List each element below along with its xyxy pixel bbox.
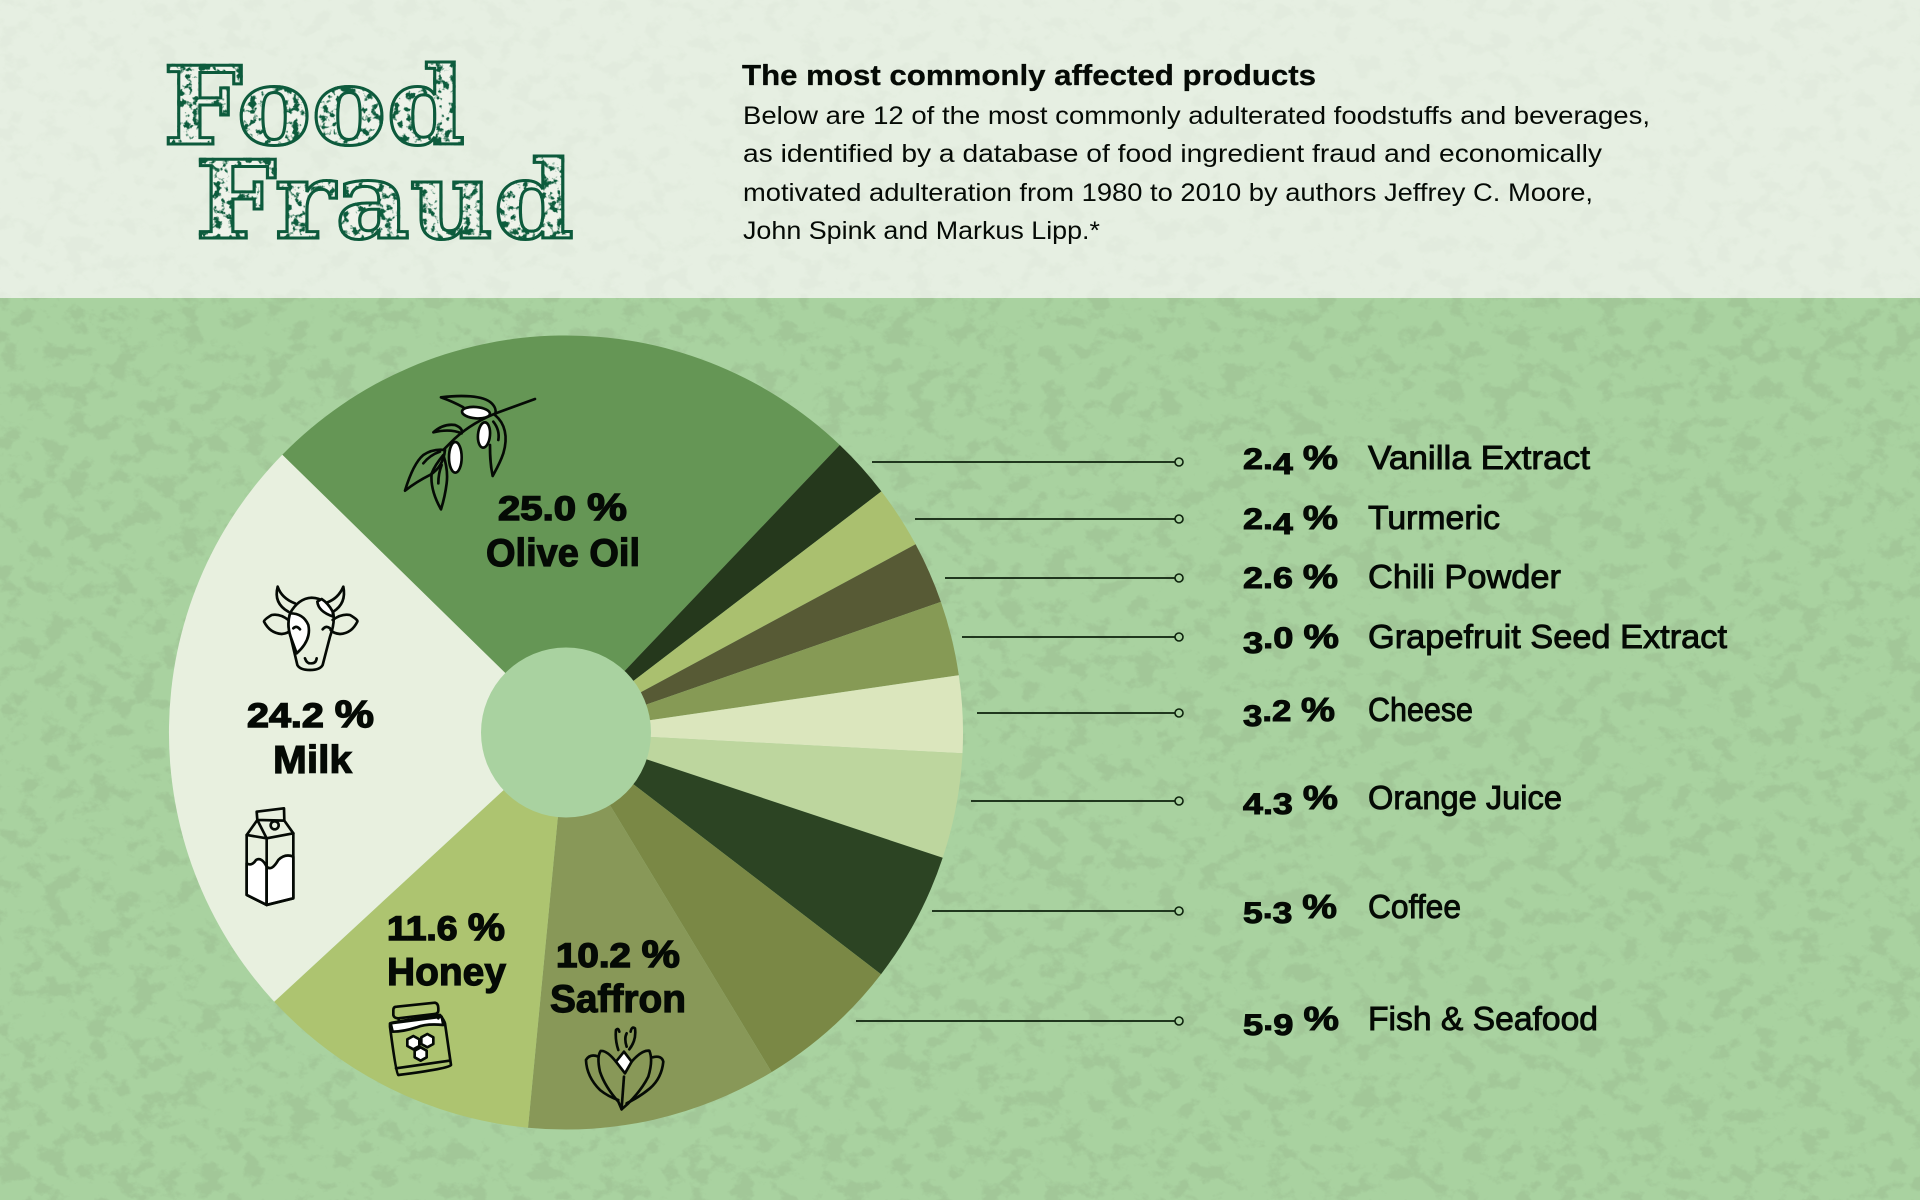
legend row: coffee: 3 <box>1273 897 1292 930</box>
leader line: coffee <box>932 907 1183 915</box>
label: saffron <box>550 934 686 1021</box>
legend row: chili powder <box>1243 558 1561 595</box>
legend row: cheese: .2 <box>1262 695 1291 728</box>
legend row: fish and seafood: 5 <box>1243 1009 1263 1042</box>
label: milk: Milk <box>273 739 352 782</box>
slice: honey <box>274 732 566 1128</box>
legend row: cheese <box>1243 691 1473 733</box>
legend row: turmeric: 4 <box>1273 508 1293 541</box>
legend row: vanilla extract: Vanilla Extract <box>1368 439 1590 476</box>
pie chart <box>169 335 963 1130</box>
legend row: grapefruit seed extract: Grapefruit Seed Extract <box>1368 618 1727 655</box>
slice: chili powder <box>566 544 941 732</box>
legend row: fish and seafood: % <box>1304 1000 1339 1037</box>
legend row: fish and seafood: 9 <box>1273 1009 1293 1042</box>
legend row: fish and seafood <box>1243 1000 1598 1042</box>
label: milk: 24. <box>247 697 294 735</box>
leader line: grapefruit seed extract <box>962 633 1183 641</box>
label: saffron: Saffron <box>550 978 686 1021</box>
legend row: vanilla extract: 2. <box>1243 443 1268 476</box>
label: olive oil: Olive Oil <box>486 532 640 575</box>
leader line: vanilla extract <box>872 458 1183 466</box>
slice: grapefruit seed extract <box>566 602 959 732</box>
heading: The most commonly affected products <box>742 60 1316 92</box>
intro text block: Below are 12 of the most commonly adulterated foodstuffs and beverages, <box>743 102 1650 130</box>
legend row: turmeric: % <box>1303 499 1338 536</box>
icon: cow <box>264 587 357 670</box>
legend row: cheese: 3 <box>1243 700 1262 733</box>
label: olive oil: 25.0 % <box>498 487 627 529</box>
icon: olive branch <box>405 396 535 509</box>
slice: olive oil <box>282 335 840 732</box>
legend row: grapefruit seed extract: 3 <box>1243 627 1263 660</box>
legend row: vanilla extract <box>1243 439 1590 481</box>
label: olive oil <box>486 487 640 575</box>
slice: saffron <box>528 732 772 1130</box>
intro text block: motivated adulteration from 1980 to 2010 by authors Jeffrey C. Moore, <box>743 179 1593 207</box>
label: milk <box>247 694 374 782</box>
legend row: orange juice: 4.3 <box>1243 788 1293 821</box>
legend row: turmeric: 2. <box>1243 503 1268 536</box>
icon: saffron flower <box>586 1028 663 1109</box>
leader line: fish and seafood <box>856 1017 1183 1025</box>
title <box>163 44 574 264</box>
legend row: coffee: % <box>1302 888 1337 925</box>
legend row: grapefruit seed extract <box>1243 618 1727 660</box>
slice: cheese <box>566 675 963 753</box>
label: milk: % <box>335 694 374 736</box>
legend row: cheese: Cheese <box>1368 691 1473 728</box>
legend row: chili powder: Chili Powder <box>1368 558 1561 595</box>
slice: orange juice <box>566 732 962 858</box>
label: honey <box>387 907 506 994</box>
legend row: coffee <box>1243 888 1461 930</box>
leader line: turmeric <box>915 515 1183 523</box>
legend row: fish and seafood: . <box>1263 1004 1273 1037</box>
legend row: chili powder: 2.6 % <box>1243 558 1338 595</box>
slice: milk <box>169 455 566 1002</box>
title: Food <box>163 44 465 170</box>
legend row: vanilla extract: % <box>1303 439 1338 476</box>
slice: vanilla extract <box>566 445 881 732</box>
intro text block <box>743 102 1650 245</box>
slice: fish and seafood <box>566 732 881 1072</box>
icon: honey jar <box>390 1003 451 1075</box>
legend row: turmeric: Turmeric <box>1368 499 1500 536</box>
leader line: orange juice <box>971 797 1183 805</box>
label: honey: 11.6 % <box>387 907 505 949</box>
leader line: cheese <box>977 709 1183 717</box>
legend row: grapefruit seed extract: .0 <box>1263 622 1293 655</box>
label: saffron: 10.2 % <box>556 934 680 976</box>
slice: turmeric <box>566 491 916 732</box>
intro text block: John Spink and Markus Lipp.* <box>743 217 1100 245</box>
legend row: coffee: . <box>1263 892 1273 925</box>
legend row: coffee: 5 <box>1243 897 1263 930</box>
legend row: grapefruit seed extract: % <box>1304 618 1339 655</box>
legend row: orange juice <box>1243 779 1562 821</box>
header band <box>0 0 1920 298</box>
title: Fraud <box>195 138 574 264</box>
intro text block: as identified by a database of food ingredient fraud and economically <box>743 140 1603 168</box>
icon: milk carton <box>247 808 293 905</box>
leader line: chili powder <box>945 574 1183 582</box>
legend row: orange juice: % <box>1303 779 1338 816</box>
label: honey: Honey <box>387 951 506 994</box>
legend row: orange juice: Orange Juice <box>1368 779 1562 816</box>
legend row: vanilla extract: 4 <box>1273 448 1293 481</box>
legend row: coffee: Coffee <box>1368 888 1461 925</box>
label: milk: 2 <box>302 697 324 735</box>
legend row: cheese: % <box>1301 691 1335 728</box>
centre hole <box>481 648 651 818</box>
legend row: fish and seafood: Fish & Seafood <box>1368 1000 1598 1037</box>
background: green textured panel <box>0 298 1920 1200</box>
legend row: turmeric <box>1243 499 1500 541</box>
slice: coffee <box>566 732 943 974</box>
